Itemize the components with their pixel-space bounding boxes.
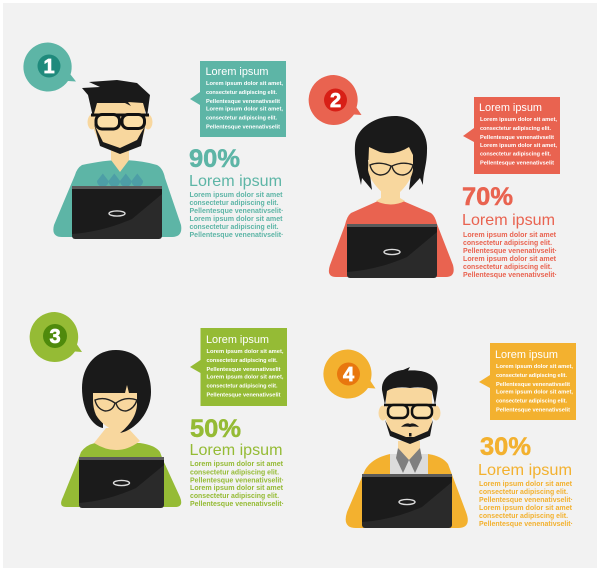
woman character with laptop: [329, 116, 454, 278]
percent text 1: 90%: [189, 145, 240, 173]
speech box 4: Lorem ipsum: [495, 349, 558, 361]
percent text 2: Pellentesque venenativselit·: [463, 270, 557, 279]
speech box 4: Pellentesque venenativselit: [496, 382, 570, 388]
speech box 4: consectetur adipiscing elit.: [496, 398, 568, 404]
speech box 4: Pellentesque venenativselit: [496, 408, 570, 414]
speech box 4: Lorem ipsum dolor sit amet,: [496, 364, 574, 370]
percent text 4: Lorem ipsum: [478, 462, 572, 479]
number bubble 2: [309, 75, 362, 125]
speech box 2: Lorem ipsum: [479, 102, 542, 114]
percent text 4: 30%: [480, 433, 531, 461]
percent text 4: Lorem ipsum dolor sit amet: [479, 503, 573, 512]
percent text 4: consectetur adipiscing elit.: [479, 511, 568, 520]
speech box 3: Lorem ipsum: [206, 334, 269, 346]
panel 1: teal man 90%: [23, 42, 286, 239]
man character with laptop: [53, 80, 181, 239]
number bubble 2: 2: [330, 90, 341, 112]
speech box 2: Pellentesque venenativselit: [480, 135, 554, 141]
panel 3: green woman 50%: [30, 312, 287, 508]
percent text 3: 50%: [190, 415, 241, 443]
speech box 2: Lorem ipsum dolor sit amet,: [480, 143, 558, 149]
number bubble 4: [323, 349, 376, 398]
percent text 2: Pellentesque venenativselit·: [463, 246, 557, 255]
speech box 4: consectetur adipiscing elit.: [496, 373, 568, 379]
speech box 1: Pellentesque venenativselit: [206, 99, 280, 105]
percent text 3: consectetur adipiscing elit.: [190, 491, 279, 500]
percent text 4: Pellentesque venenativselit·: [479, 519, 573, 528]
number bubble 1: 1: [43, 56, 55, 78]
percent text 3: Lorem ipsum dolor sit amet: [190, 459, 284, 468]
speech box 1: consectetur adipiscing elit.: [206, 116, 278, 122]
percent text 3: Lorem ipsum dolor sit amet: [190, 483, 284, 492]
speech box 2: [463, 97, 560, 174]
percent text 3: Pellentesque venenativselit·: [190, 499, 284, 508]
speech box 4: [479, 343, 576, 420]
percent text 1: Pellentesque venenativselit·: [190, 206, 284, 215]
percent text 1: Lorem ipsum: [189, 173, 282, 190]
percent text 1: Lorem ipsum dolor sit amet: [190, 214, 283, 223]
percent text 2: [462, 183, 557, 279]
speech box 1: Lorem ipsum dolor sit amet,: [206, 81, 284, 87]
percent text 1: Pellentesque venenativselit·: [190, 230, 284, 239]
percent text 3: Lorem ipsum: [190, 442, 282, 459]
percent text 2: Lorem ipsum dolor sit amet: [463, 254, 557, 263]
number bubble 3: 3: [49, 326, 61, 348]
number bubble 4: 4: [343, 364, 355, 386]
speech box 3: Lorem ipsum dolor sit amet,: [206, 349, 284, 355]
percent text 2: consectetur adipiscing elit.: [463, 262, 552, 271]
percent text 1: consectetur adipiscing elit.: [190, 198, 278, 207]
woman character with laptop: [61, 350, 181, 508]
speech box 1: Lorem ipsum: [206, 66, 268, 78]
speech box 1: Pellentesque venenativselit: [206, 124, 280, 130]
speech box 2: Lorem ipsum dolor sit amet,: [480, 117, 558, 123]
percent text 4: Pellentesque venenativselit·: [479, 495, 573, 504]
percent text 3: Pellentesque venenativselit·: [190, 476, 284, 484]
number bubble 1: [23, 42, 76, 91]
speech box 1: Lorem ipsum dolor sit amet,: [206, 106, 284, 112]
speech box 3: Pellentesque venenativselit: [206, 367, 281, 373]
percent text 4: Lorem ipsum dolor sit amet: [479, 479, 573, 488]
speech box 1: consectetur adipiscing elit.: [206, 90, 278, 96]
speech box 2: consectetur adipiscing elit.: [480, 126, 552, 132]
percent text 4: consectetur adipiscing elit.: [479, 487, 568, 496]
speech box 1: [190, 61, 286, 137]
speech box 3: Pellentesque venenativselit: [206, 392, 281, 398]
man character with laptop: [346, 367, 468, 528]
percent text 1: consectetur adipiscing elit.: [190, 222, 278, 231]
number bubble 3: [30, 312, 82, 362]
percent text 2: Lorem ipsum: [462, 212, 555, 229]
percent text 2: 70%: [462, 183, 513, 211]
panel 4: yellow man 30%: [323, 343, 576, 528]
percent text 3: consectetur adipiscing elit.: [190, 468, 279, 476]
speech box 4: Lorem ipsum dolor sit amet,: [496, 390, 574, 396]
percent text 2: consectetur adipiscing elit.: [463, 238, 552, 247]
panel 2: red woman 70%: [309, 75, 560, 279]
speech box 2: consectetur adipiscing elit.: [480, 152, 552, 158]
speech box 3: [190, 328, 287, 406]
percent text 1: Lorem ipsum dolor sit amet: [190, 190, 283, 199]
percent text 4: [478, 433, 573, 528]
percent text 3: [190, 415, 284, 508]
speech box 3: consectetur adipiscing elit.: [206, 358, 278, 364]
speech box 3: Lorem ipsum dolor sit amet,: [206, 374, 284, 380]
percent text 2: Lorem ipsum dolor sit amet: [463, 230, 557, 239]
speech box 2: Pellentesque venenativselit: [480, 160, 554, 166]
percent text 1: [189, 145, 284, 239]
speech box 3: consectetur adipiscing elit.: [206, 384, 278, 390]
